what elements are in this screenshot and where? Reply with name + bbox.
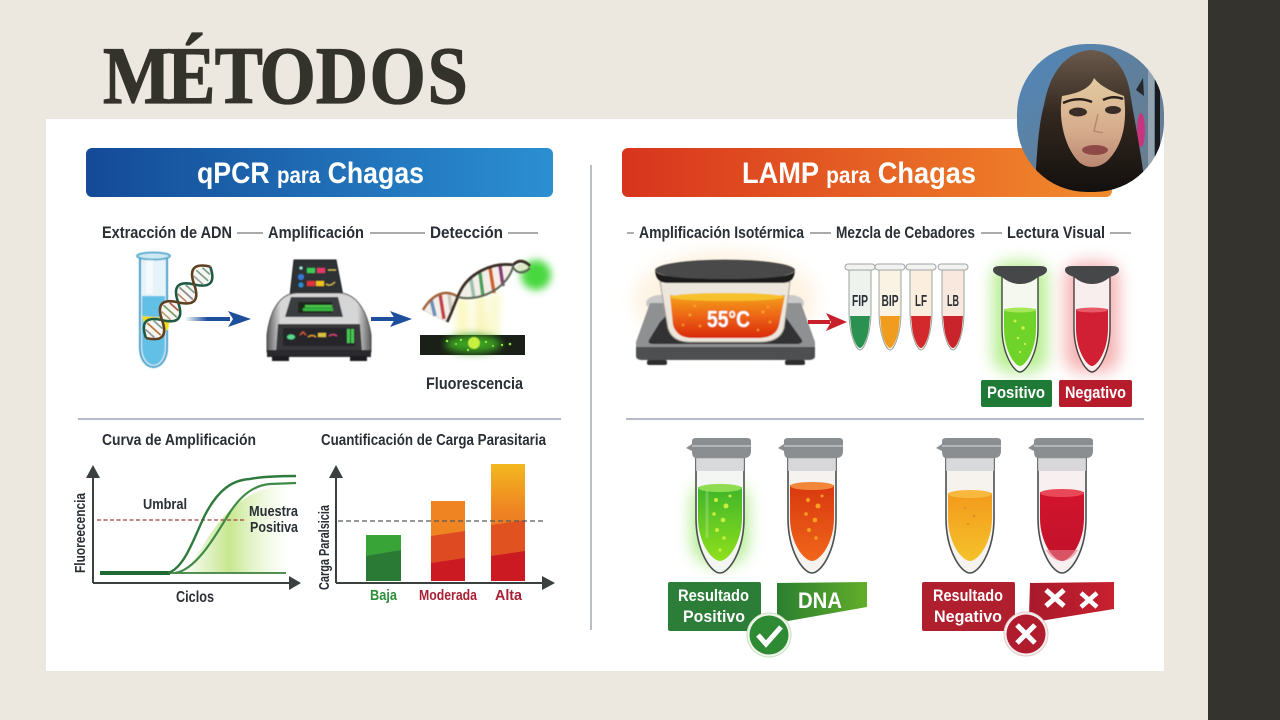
panel: qPCR header — [86, 148, 553, 197]
chart: amplification curve: Positiva — [250, 520, 299, 536]
badge: Positivo — [981, 380, 1052, 407]
LAMP step labels — [627, 223, 1131, 242]
icon: light beams — [456, 293, 500, 340]
badge: Resultado Positivo — [668, 582, 761, 631]
icon: thermocycler — [267, 260, 371, 361]
chart: parasite load: Baja — [370, 587, 398, 604]
label: Fluorescencia: Fluorescencia — [426, 374, 523, 393]
qPCR step labels — [102, 223, 538, 242]
icon: detection plate — [420, 335, 525, 355]
icon: cross circle — [1004, 612, 1048, 656]
white content panel — [46, 119, 1164, 671]
icon: LB tube: LB — [947, 293, 959, 310]
arrow: plate to primers — [808, 313, 847, 331]
panel: LAMP header — [622, 148, 1112, 197]
badge: Resultado Negativo: Negativo — [934, 608, 1002, 626]
icon: positive result tube — [686, 438, 751, 573]
chart: amplification curve: Fluoreecencia — [73, 492, 89, 573]
icon: LF tube: LF — [915, 293, 927, 310]
chart: parasite load: Moderada — [419, 587, 478, 604]
icon: positive visual tube — [993, 262, 1047, 372]
icon: negative visual tube — [1065, 262, 1119, 372]
icon: LF tube — [906, 264, 936, 350]
icon: yellow negative tube — [936, 438, 1001, 573]
badge: DNA: DNA — [798, 588, 842, 613]
LAMP step labels: Lectura Visual — [1007, 223, 1105, 242]
arrow: extraction to amplification — [185, 311, 251, 327]
chart: amplification curve: Curva de Amplificación — [102, 432, 256, 449]
icon: fluorescent glow — [521, 260, 551, 290]
arrow: amplification to detection — [371, 311, 412, 327]
icon: DNA helix on tube — [138, 259, 218, 345]
icon: BIP tube: BIP — [882, 293, 899, 310]
chart: amplification curve: Muestra — [249, 504, 299, 520]
icon: check mark — [747, 613, 791, 657]
icon: LB tube — [938, 264, 968, 350]
icon: orange DNA tube — [778, 438, 843, 573]
LAMP step labels: Amplificación Isotérmica — [639, 223, 804, 242]
icon: FIP tube: FIP — [852, 293, 868, 310]
icon: BIP tube — [875, 264, 905, 350]
badge: Resultado Positivo: Resultado — [678, 587, 749, 605]
icon: red negative tube — [1028, 438, 1093, 573]
panel: qPCR header: qPCR para Chagas — [197, 157, 424, 190]
dark side band — [1208, 0, 1280, 720]
chart: parasite load: Carga Paralsicia — [317, 504, 333, 590]
icon: hot plate with 55°C bowl — [633, 250, 817, 365]
chart: parasite load: Alta — [495, 587, 523, 604]
badge: Resultado Negativo — [922, 582, 1015, 631]
presenter webcam — [1017, 44, 1164, 192]
panel: LAMP header: LAMP para Chagas — [742, 157, 976, 190]
chart: parasite load — [317, 432, 555, 604]
badge: Positivo: Positivo — [987, 383, 1045, 402]
icon: fluorescing DNA — [423, 261, 530, 322]
title: MÉTODOS — [103, 30, 468, 121]
chart: parasite load: Cuantificación de Carga Parasitaria — [321, 432, 546, 449]
chart: amplification curve: Ciclos — [176, 589, 214, 606]
chart: amplification curve: Umbral — [143, 497, 187, 513]
icon: test tube with DNA — [137, 252, 170, 367]
badge: Resultado Positivo: Positivo — [683, 608, 745, 626]
icon: hot plate with 55°C bowl: 55°C — [707, 306, 750, 332]
LAMP step labels: Mezcla de Cebadores — [836, 223, 975, 242]
qPCR step labels: Amplificación — [268, 223, 364, 242]
icon: FIP tube — [845, 264, 875, 350]
badge: Resultado Negativo: Resultado — [933, 587, 1003, 605]
badge: Negativo — [1059, 380, 1132, 407]
badge: Negativo: Negativo — [1065, 383, 1126, 402]
qPCR step labels: Detección — [430, 223, 503, 242]
badge: DNA — [777, 582, 867, 621]
badge: cross marks — [1029, 582, 1114, 621]
qPCR step labels: Extracción de ADN — [102, 223, 232, 242]
chart: amplification curve — [73, 432, 301, 606]
